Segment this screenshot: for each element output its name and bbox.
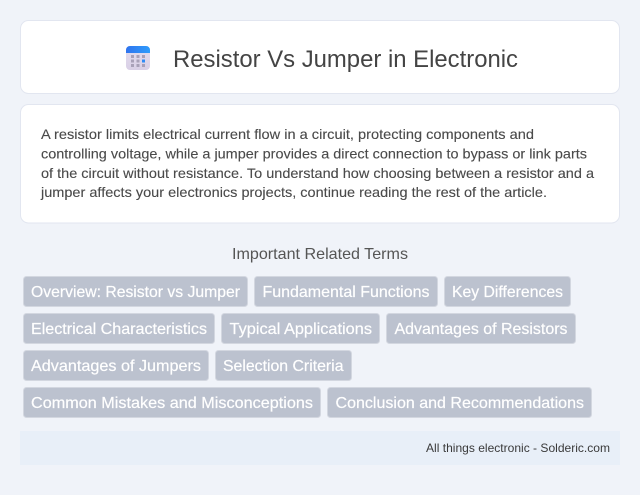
footer credit: All things electronic - Solderic.com (426, 441, 610, 455)
tag: selection criteria (216, 350, 352, 380)
panel: description (20, 104, 620, 223)
tag: electrical characteristics: Electrical Characteristics (31, 321, 207, 338)
tags: related terms (24, 276, 592, 418)
tag: advantages of resistors: Advantages of Resistors (394, 321, 568, 338)
tag: conclusion: Conclusion and Recommendations (336, 395, 584, 412)
tag: advantages of resistors (386, 314, 576, 344)
tag: advantages of jumpers: Advantages of Jumpers (31, 358, 201, 375)
tag: typical applications: Typical Applications (230, 321, 372, 338)
tag: fundamental functions: Fundamental Functions (262, 284, 430, 301)
tag: overview: Overview: Resistor vs Jumper (31, 284, 241, 301)
text block: description line 1: A resistor limits electrical current flow in a circuit, protecting components and (41, 126, 534, 142)
panel: header (20, 20, 620, 94)
tag: conclusion (328, 388, 592, 418)
icon: calendar (126, 46, 150, 70)
tag: typical applications (222, 314, 380, 344)
heading: important related terms: Important Related Terms (232, 246, 408, 263)
tag: key differences (444, 276, 570, 306)
tag: common mistakes: Common Mistakes and Misconceptions (31, 395, 313, 412)
title: Resistor Vs Jumper in Electronic (173, 46, 518, 73)
text block: description line 3: of the circuit without resistance. To understand how choosing between a resistor and a (41, 165, 594, 181)
tag: fundamental functions (254, 276, 438, 306)
text block: description line 4: jumper affects your electronics projects, continue reading the rest of the article. (40, 184, 547, 200)
tag: overview (24, 276, 248, 306)
text block: description line 2: controlling voltage, while a jumper provides a direct connection to bypass or link parts (41, 146, 587, 162)
tag: electrical characteristics (24, 314, 214, 344)
tag: common mistakes (24, 388, 320, 418)
tag: selection criteria: Selection Criteria (223, 358, 344, 375)
footer (20, 431, 620, 465)
tag: key differences: Key Differences (452, 284, 563, 301)
tag: advantages of jumpers (24, 350, 208, 380)
